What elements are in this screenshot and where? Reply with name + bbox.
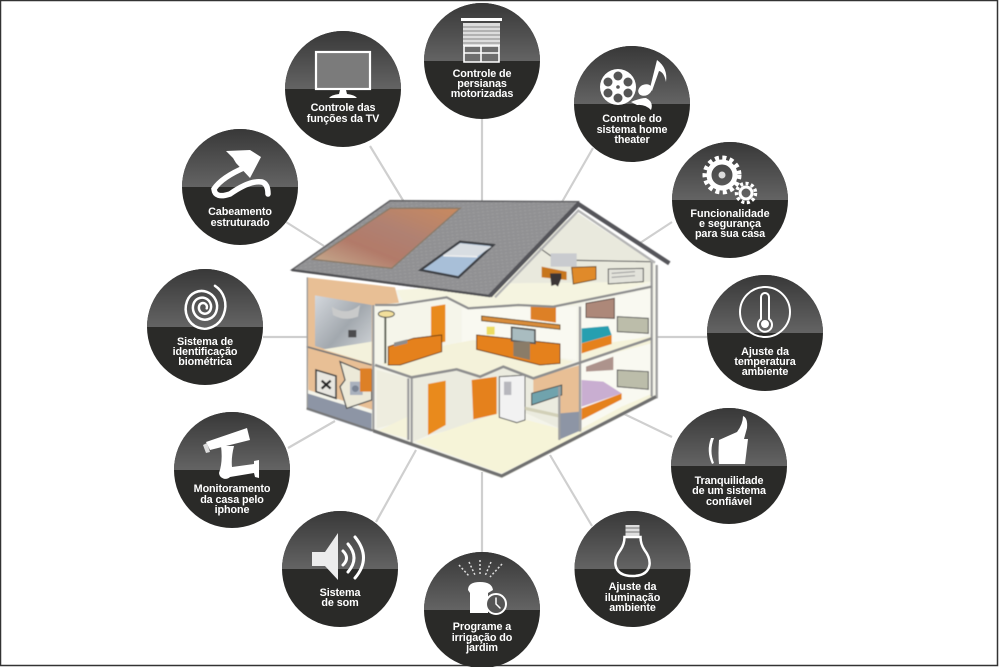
- label: [452, 621, 513, 654]
- panel: monitoramento da casa pelo iphone: [174, 412, 290, 528]
- icon: security camera: [203, 428, 259, 479]
- icon: sprinkler with clock: [459, 560, 506, 614]
- label: Controle das: [311, 102, 375, 114]
- label: para sua casa: [695, 228, 766, 240]
- house illustration: [292, 201, 669, 478]
- ground floor: [412, 367, 559, 442]
- boiler: [499, 375, 525, 423]
- label: estruturado: [211, 217, 270, 229]
- label: Sistema: [320, 587, 361, 599]
- icon: TV: [316, 52, 370, 98]
- label: [208, 206, 272, 229]
- door upper: [431, 304, 445, 345]
- panel: ajuste da iluminação ambiente: [574, 511, 690, 627]
- label: jardim: [465, 642, 498, 654]
- label: theater: [614, 134, 651, 146]
- label: biométrica: [178, 356, 233, 368]
- label: Controle do: [602, 113, 662, 125]
- label: temperatura: [734, 356, 797, 368]
- icon: thermometer: [740, 287, 790, 337]
- structural lines: [373, 262, 657, 443]
- icon: gears: [705, 158, 756, 202]
- label: confiável: [706, 496, 752, 508]
- label: da casa pelo: [200, 494, 264, 506]
- label: Ajuste da: [609, 581, 657, 593]
- panel: tranquilidade de um sistema confiável: [671, 408, 787, 524]
- lamp: [382, 317, 388, 363]
- panel: sistema de som: [282, 511, 398, 627]
- label: Monitoramento: [194, 483, 271, 495]
- label: motorizadas: [451, 88, 513, 100]
- icon: fingerprint: [180, 279, 232, 334]
- sofa: [388, 335, 442, 365]
- solar panel: [313, 208, 460, 268]
- door lower: [428, 381, 446, 435]
- icon: persiana: [461, 18, 502, 62]
- icon: film reel and note: [600, 60, 666, 110]
- label: Controle de: [453, 68, 512, 80]
- panel: cabeamento estruturado: [182, 129, 298, 245]
- house walls: [307, 213, 657, 478]
- basement stone: [307, 393, 372, 432]
- wall shelf: [482, 316, 560, 329]
- closet: [472, 377, 497, 419]
- label: [692, 475, 767, 508]
- label: Cabeamento: [208, 206, 272, 218]
- label: ambiente: [742, 366, 788, 378]
- panel: controle do sistema home theater: [574, 46, 690, 162]
- icon: speaker: [312, 533, 364, 580]
- floor slab: [373, 397, 656, 476]
- label: iluminação: [605, 592, 661, 604]
- label: e segurança: [699, 218, 762, 230]
- panel: funcionalidade e segurança: [672, 142, 788, 258]
- label: Tranquilidade: [695, 475, 764, 487]
- panel: programe a irrigação do jardim: [424, 552, 540, 667]
- label: [320, 587, 361, 609]
- label: [605, 581, 661, 614]
- connector lines: [263, 118, 707, 553]
- icon: thumb up: [709, 416, 748, 464]
- label: Ajuste da: [741, 346, 790, 358]
- label: [194, 483, 271, 516]
- label: funções da TV: [307, 113, 380, 125]
- label: [307, 102, 380, 125]
- icon: light bulb: [615, 525, 650, 576]
- label: Funcionalidade: [690, 208, 770, 220]
- panel: ajuste da temperatura ambiente: [707, 275, 823, 391]
- label: [451, 68, 513, 100]
- label: [690, 208, 770, 240]
- label: de um sistema: [692, 485, 767, 497]
- skylight: [421, 242, 493, 277]
- kitchen: [315, 295, 372, 363]
- panel: sistema de identificação biométrica: [147, 269, 263, 385]
- label: [734, 346, 797, 378]
- label: [173, 336, 238, 368]
- label: irrigação do: [452, 632, 513, 644]
- orange partition: [533, 365, 580, 413]
- utility room: [316, 370, 336, 398]
- roof: [292, 201, 578, 297]
- label: sistema home: [597, 124, 667, 136]
- attic: [510, 213, 652, 283]
- label: persianas: [457, 78, 507, 90]
- panel: controle das funções da TV: [285, 31, 401, 147]
- label: ambiente: [609, 602, 656, 614]
- living room walls: [375, 298, 577, 367]
- label: Sistema de: [177, 336, 233, 348]
- bedrooms: [582, 288, 652, 360]
- gable trim: [490, 204, 669, 296]
- label: Programe a: [453, 621, 512, 633]
- label: de som: [321, 597, 359, 609]
- panel: controle de persianas motorizadas: [424, 3, 540, 119]
- label: iphone: [215, 504, 249, 516]
- left exterior wall orange: [307, 277, 400, 410]
- media unit: [477, 335, 560, 365]
- label: [597, 113, 667, 146]
- icon: cable: [214, 150, 268, 196]
- label: identificação: [173, 346, 238, 358]
